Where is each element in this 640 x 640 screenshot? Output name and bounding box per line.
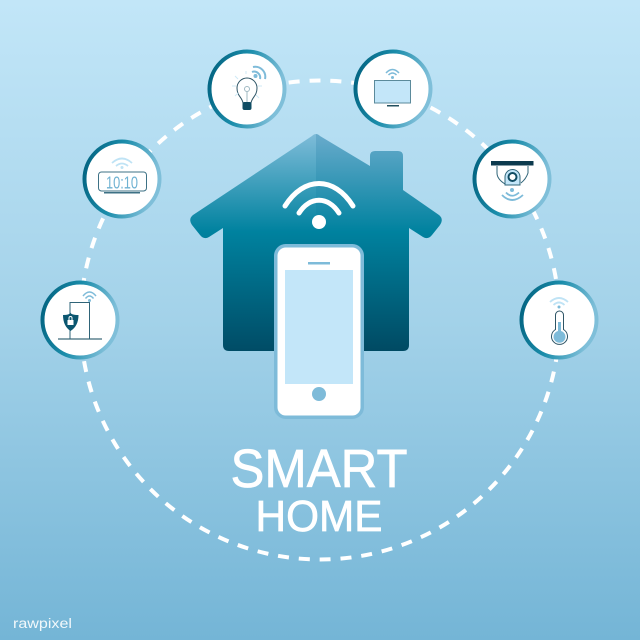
dashed connection circle <box>80 80 560 560</box>
wifi symbol on house <box>285 184 353 229</box>
house right half with chimney <box>316 134 442 351</box>
icon: security camera <box>474 142 550 216</box>
title <box>230 439 408 541</box>
smartphone <box>276 246 362 417</box>
watermark: rawpixel <box>13 616 72 631</box>
icon: smart bulb <box>210 52 284 126</box>
icon: thermometer <box>522 282 596 358</box>
title: HOME <box>256 492 382 541</box>
phone home button <box>312 387 326 401</box>
icon: digital clock: 10:10 <box>106 172 138 192</box>
phone screen <box>285 270 353 384</box>
house left half <box>190 134 316 351</box>
icon: digital clock <box>84 142 160 216</box>
title: SMART <box>230 439 408 499</box>
phone speaker <box>308 262 330 264</box>
house <box>190 134 442 351</box>
icon: smart lock <box>42 282 118 358</box>
icon: smart tv <box>356 52 430 126</box>
